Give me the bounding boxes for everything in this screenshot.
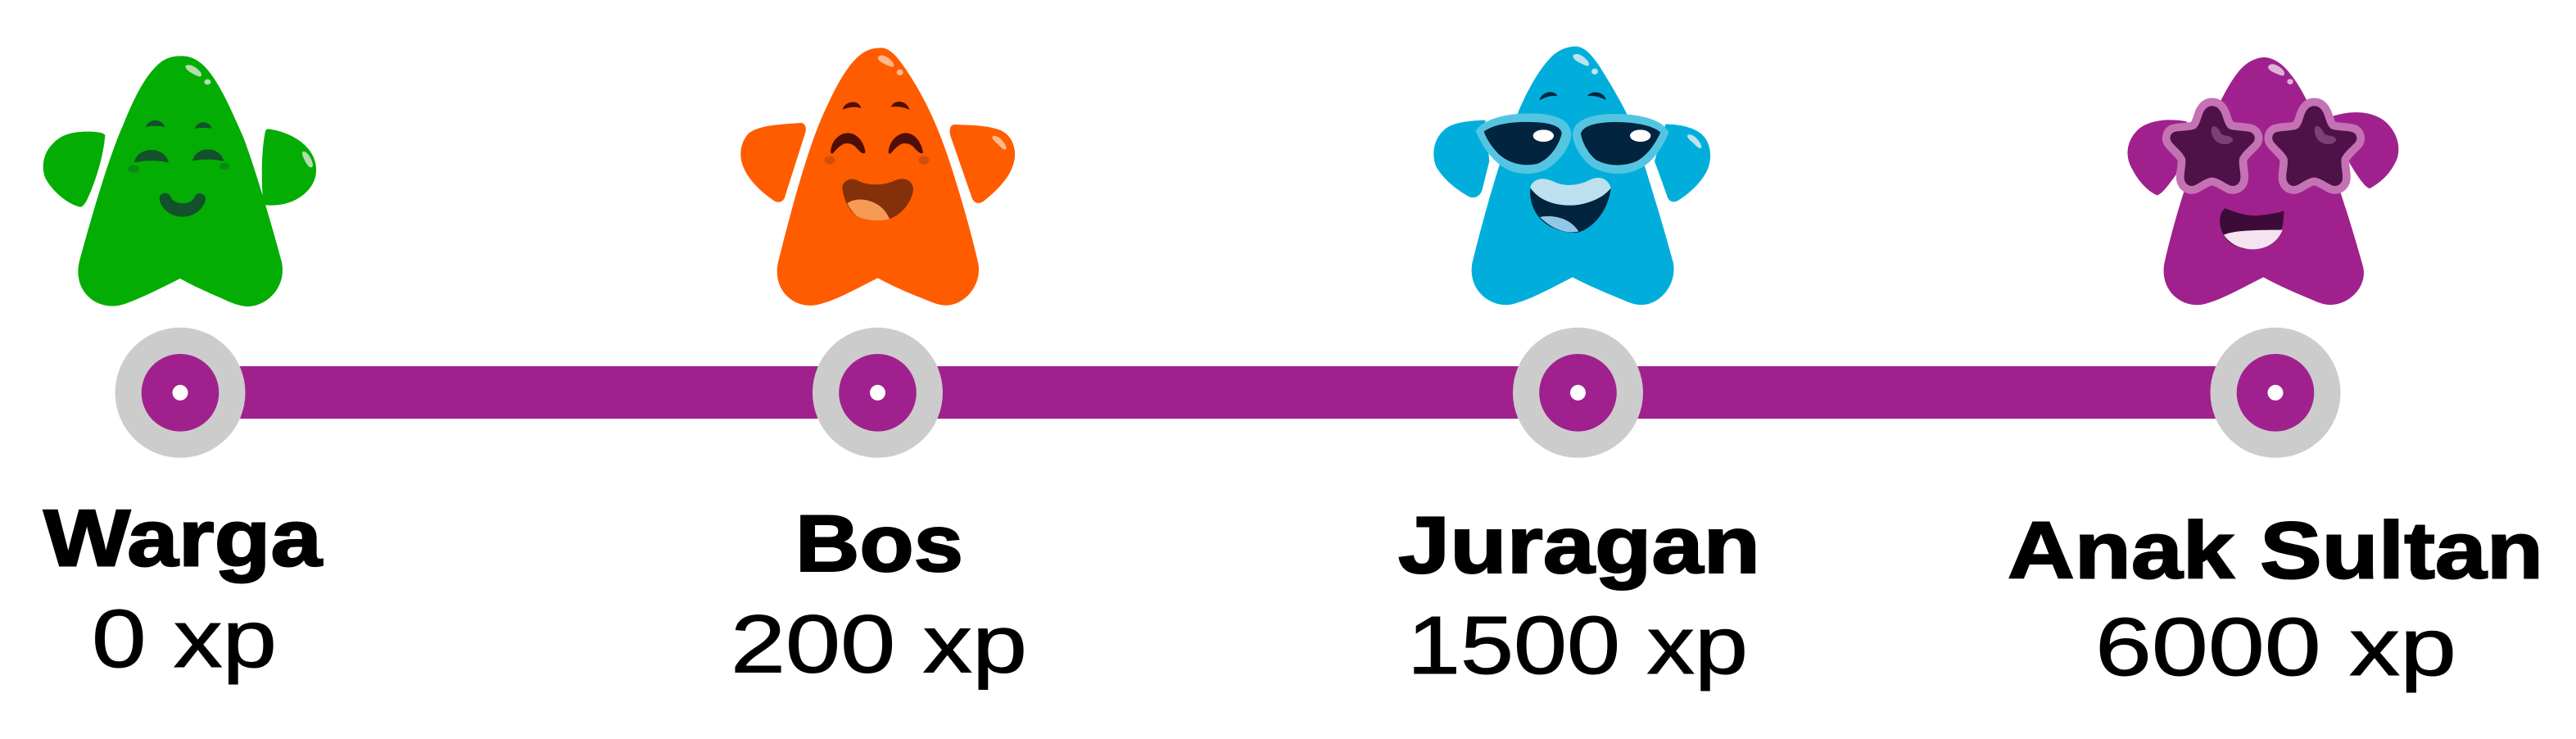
face — [134, 120, 224, 217]
mascot: Juragan blue star — [1433, 47, 1710, 305]
teeth — [1530, 178, 1611, 206]
node: Bos — [813, 328, 943, 458]
right arm — [2333, 112, 2398, 188]
label: Bos: Bos — [795, 498, 963, 588]
left arm — [43, 132, 105, 207]
label: Juragan: Juragan — [1398, 500, 1760, 590]
mascot: Warga green star — [43, 56, 316, 306]
label: Warga: Warga — [43, 493, 324, 583]
brows — [1539, 92, 1606, 101]
body — [1472, 47, 1674, 305]
left arm — [1433, 120, 1489, 197]
eyes and brows — [831, 102, 923, 154]
mouth — [842, 179, 913, 220]
body — [777, 48, 979, 306]
lens highlights — [2212, 126, 2233, 144]
right arm — [1655, 125, 1710, 202]
mascot: Anak Sultan purple star — [2128, 57, 2398, 305]
left arm — [740, 123, 806, 202]
highlights — [1533, 129, 1554, 142]
cheeks — [128, 163, 229, 173]
xp: 0 xp: 0 xp — [92, 593, 277, 685]
star glasses — [2171, 106, 2356, 186]
cheeks — [824, 156, 930, 165]
tongue — [847, 199, 890, 220]
shine — [1573, 54, 1701, 148]
mouth — [2220, 208, 2284, 249]
xp: 200 xp: 200 xp — [731, 598, 1027, 690]
tongue — [1540, 216, 1578, 232]
shine — [185, 65, 313, 167]
mouth — [1530, 188, 1611, 233]
teeth — [2224, 230, 2283, 249]
right arm — [262, 129, 316, 206]
left lens with frame — [2171, 106, 2255, 186]
mascot: Bos orange star — [740, 48, 1015, 306]
sunglasses — [1476, 113, 1668, 174]
shine — [2268, 64, 2293, 84]
left arm — [2128, 120, 2187, 195]
label: Anak Sultan: Anak Sultan — [2008, 505, 2543, 595]
right lens with frame — [2272, 106, 2356, 186]
node: Warga — [115, 328, 246, 458]
xp: 1500 xp: 1500 xp — [1407, 600, 1748, 691]
frames — [1476, 113, 1571, 174]
lenses — [1484, 122, 1562, 165]
body — [2164, 57, 2364, 305]
xp: 6000 xp: 6000 xp — [2095, 601, 2456, 693]
node: Anak Sultan — [2210, 328, 2341, 458]
progress bar — [180, 366, 2275, 419]
node: Juragan — [1513, 328, 1643, 458]
right arm — [950, 125, 1015, 203]
body — [78, 56, 283, 306]
shine — [878, 56, 1007, 150]
